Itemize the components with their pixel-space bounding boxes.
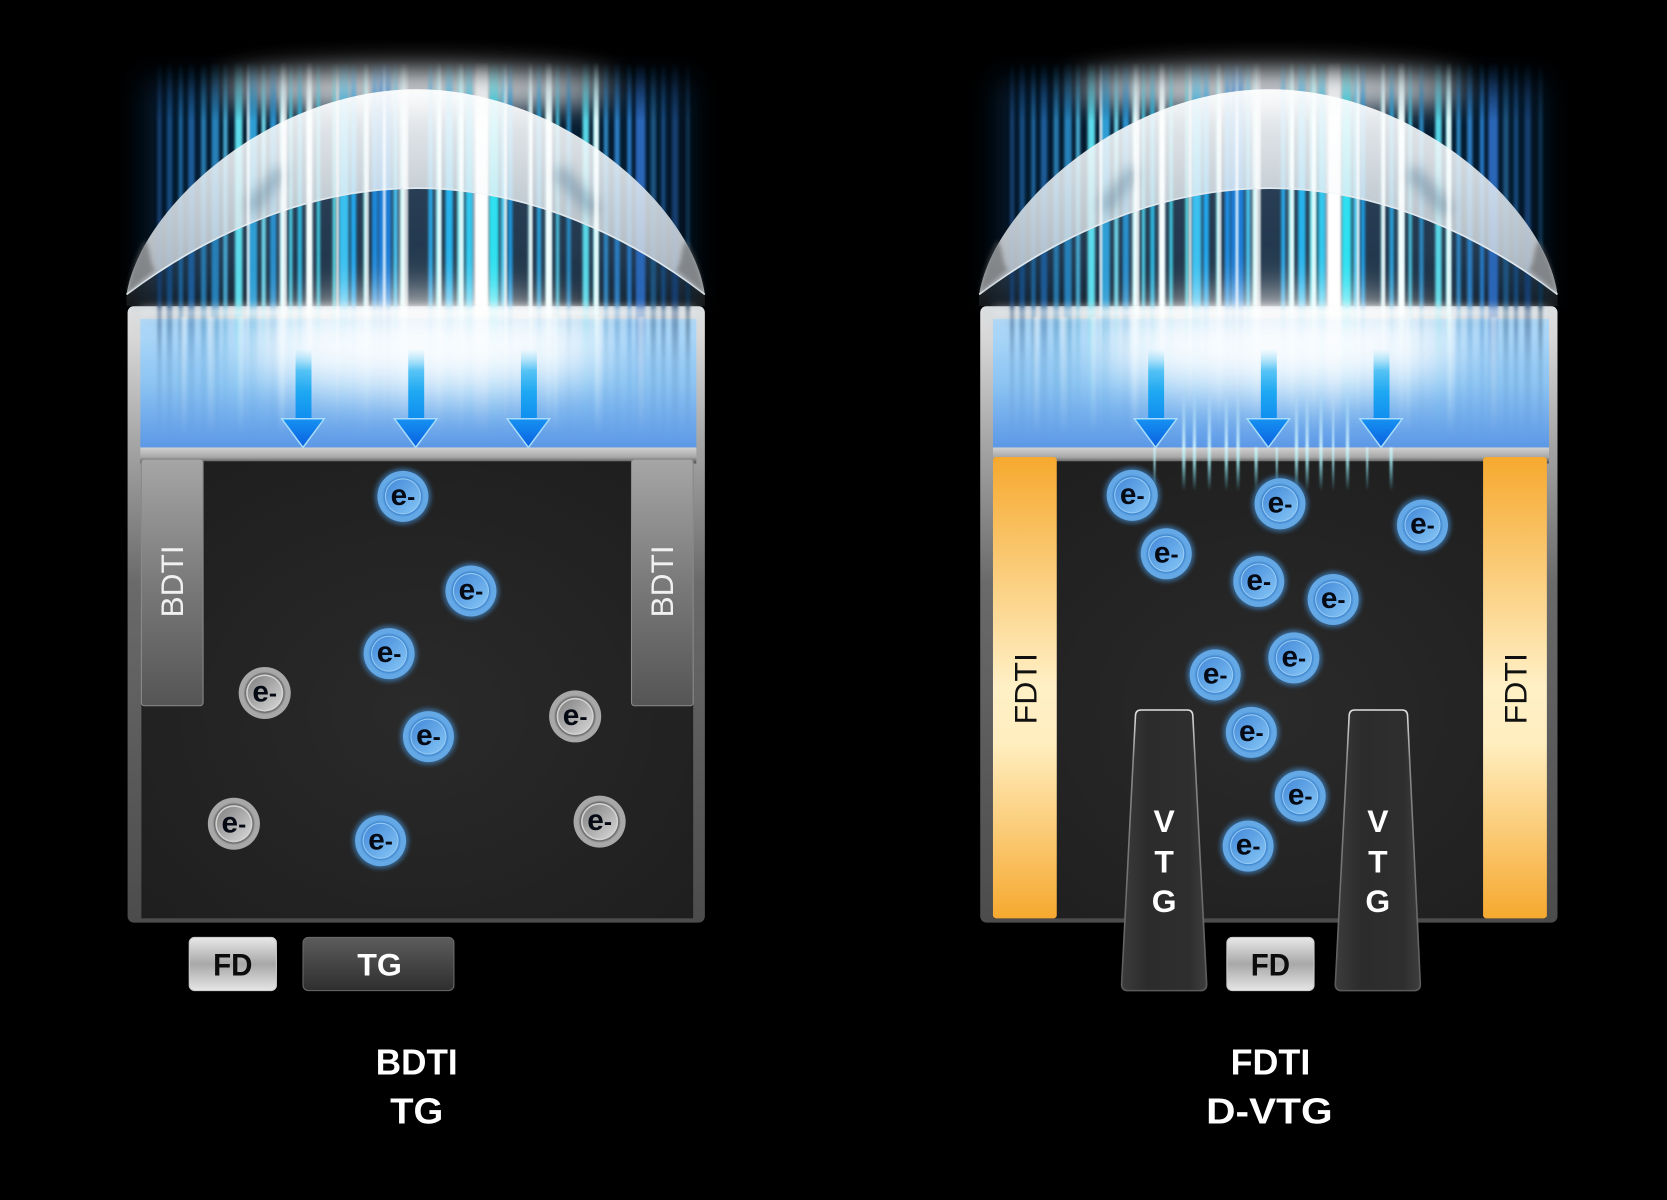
silicon well: [141, 461, 693, 918]
blue electron: e-: [459, 573, 483, 606]
blue electron: e-: [1288, 779, 1313, 812]
lens with light rays: [127, 53, 705, 446]
blue electron: e-: [1120, 478, 1145, 511]
panel: FDTI D-VTG pixel: [979, 53, 1557, 1131]
cell frame and colour filter: [980, 306, 1557, 923]
FDTI right isolation bar: [1483, 457, 1547, 918]
blue electron: e-: [377, 636, 401, 669]
blue electron: [352, 813, 409, 869]
BDTI left isolation bar: [141, 459, 203, 706]
blue electron: [1305, 571, 1361, 628]
BDTI right isolation bar: [632, 459, 693, 706]
blue electron: e-: [1268, 486, 1292, 519]
blue electron: e-: [1321, 582, 1346, 615]
blue electron: e-: [416, 719, 441, 752]
light rays entering well: [1154, 393, 1393, 491]
blue electron: e-: [1239, 715, 1264, 748]
blue electron: [1220, 818, 1276, 874]
VTG left gate: T: [1154, 844, 1174, 880]
VTG right gate: G: [1365, 883, 1390, 919]
VTG left gate: [1122, 710, 1207, 991]
caption: D-VTG: [1206, 1090, 1333, 1131]
light glow and three down arrows: [993, 299, 1549, 447]
panel: BDTI TG pixel: [127, 53, 705, 1131]
blue electron: e-: [1281, 640, 1306, 673]
blue electron: [1223, 704, 1279, 760]
gray electron: e-: [252, 676, 277, 709]
gray electron: e-: [563, 699, 588, 732]
BDTI right isolation bar: BDTI: [644, 545, 680, 618]
FDTI right isolation bar: FDTI: [1498, 653, 1534, 724]
FDTI left isolation bar: [993, 457, 1057, 918]
blue electron: [400, 708, 457, 765]
cell frame and colour filter: [128, 306, 705, 923]
blue electron: [1252, 476, 1308, 532]
BDTI left isolation bar: BDTI: [154, 545, 190, 618]
caption: [376, 1042, 458, 1131]
gray electron: [208, 798, 260, 850]
blue electron: e-: [1236, 829, 1260, 862]
light glow and three down arrows: [140, 299, 696, 447]
gray electron: [239, 667, 291, 719]
gray electron: e-: [587, 804, 612, 837]
caption: TG: [390, 1090, 443, 1131]
caption: FDTI: [1231, 1042, 1310, 1083]
blue electron: e-: [391, 479, 415, 512]
gray electron: [549, 690, 601, 742]
caption: BDTI: [376, 1042, 458, 1083]
gray electron: e-: [222, 806, 246, 839]
blue electron: [1394, 497, 1451, 553]
VTG right gate: V: [1367, 803, 1389, 839]
FDTI left isolation bar: FDTI: [1008, 653, 1044, 724]
blue electron: e-: [1154, 536, 1179, 569]
blue electron: [361, 626, 417, 682]
blue electron: [375, 468, 431, 525]
VTG right gate: T: [1368, 844, 1388, 880]
blue electron: e-: [1203, 657, 1228, 690]
blue electron: e-: [1410, 508, 1435, 541]
blue electron: e-: [1246, 564, 1271, 597]
caption: [1206, 1042, 1333, 1131]
TG chip: TG: [357, 947, 402, 983]
FD chip: FD: [213, 947, 252, 983]
blue electron: [1272, 768, 1328, 824]
silicon well: [994, 461, 1546, 918]
blue electron: [1138, 526, 1194, 582]
blue electron: [1104, 467, 1160, 523]
VTG left gate: V: [1154, 803, 1176, 839]
gray electron: [574, 796, 626, 848]
FD chip: FD: [1251, 947, 1290, 983]
FD chip: [1227, 937, 1314, 991]
blue electron: e-: [368, 823, 393, 856]
FD chip: [189, 937, 276, 991]
blue electron: [443, 563, 499, 619]
VTG right gate: [1335, 710, 1420, 991]
blue electron: [1187, 647, 1243, 703]
blue electron: [1266, 630, 1322, 686]
VTG left gate: G: [1152, 883, 1177, 919]
lens with light rays: [979, 53, 1557, 446]
blue electron: [1231, 553, 1287, 610]
TG chip: [303, 937, 454, 991]
